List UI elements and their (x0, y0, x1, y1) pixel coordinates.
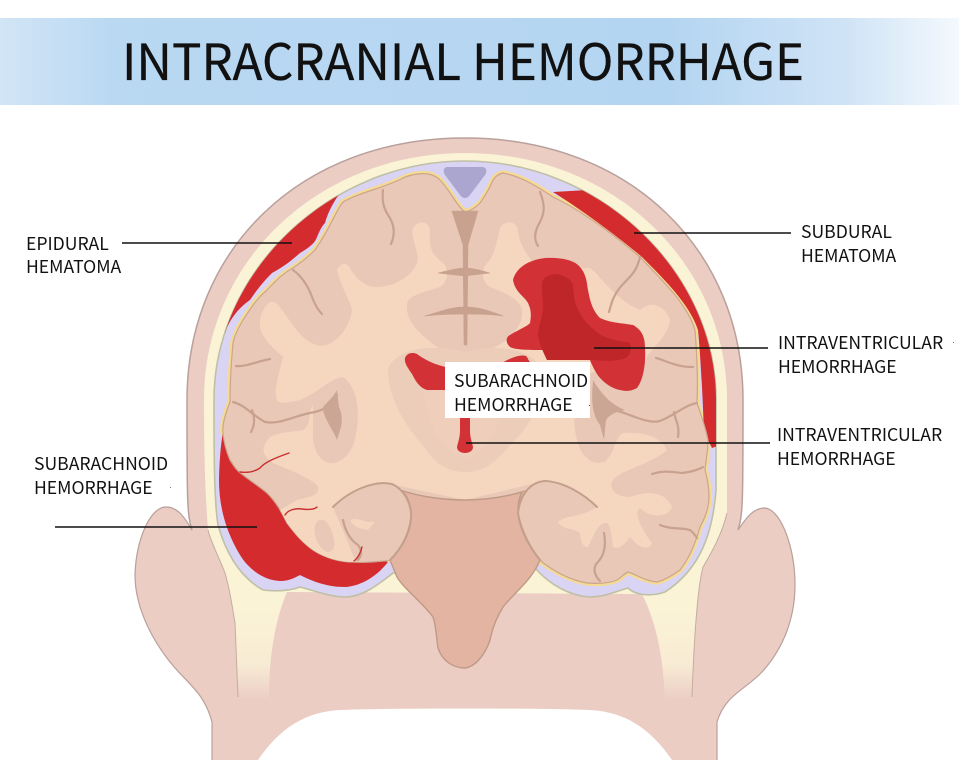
subarachnoid hemorrhage left region (219, 434, 388, 587)
sylvian fissures (323, 390, 342, 440)
meningeal bleeding vessels (240, 453, 362, 561)
brain stem (390, 490, 540, 668)
label: epidural hematoma (26, 231, 121, 279)
dura: lavender layer (214, 161, 716, 597)
label: intraventricular hemorrhage upper: INTRAVENTRICULAR (778, 330, 943, 355)
label: intraventricular hemorrhage lower: INTRAVENTRICULAR (777, 422, 942, 447)
label: epidural hematoma: HEMATOMA (26, 254, 121, 279)
scalp (187, 138, 743, 600)
ears and neck (135, 507, 795, 760)
label: intraventricular hemorrhage lower: HEMORRHAGE (777, 446, 896, 471)
intraparenchymal hemorrhage (507, 258, 645, 391)
white matter (260, 222, 672, 565)
brain (223, 173, 709, 583)
label: intraventricular hemorrhage upper: HEMORRHAGE (778, 354, 897, 379)
epidural hematoma (224, 195, 338, 333)
subdural hematoma (553, 190, 716, 448)
label: subdural hematoma: HEMATOMA (801, 243, 896, 268)
small cortical patch (315, 520, 334, 552)
basal ganglia shading (388, 348, 542, 472)
label: subarachnoid hemorrhage left: SUBARACHNOID (34, 451, 168, 476)
label: epidural hematoma: EPIDURAL (26, 231, 109, 256)
lower pink tissue (269, 592, 665, 705)
hemorrhage layers clipped to the dura (215, 187, 760, 587)
skull (204, 153, 727, 700)
label: subarachnoid hemorrhage left (34, 451, 168, 500)
ear outlines (135, 507, 795, 760)
label: intraventricular hemorrhage lower (777, 422, 942, 471)
label box: subarachnoid hemorrhage center: HEMORRHAGE (454, 392, 573, 417)
title banner (0, 18, 959, 105)
temporal lobe outlines (333, 481, 597, 560)
leader line: intraventricular lower (466, 442, 770, 444)
hemorrhage core (538, 274, 631, 361)
superior sagittal sinus (444, 167, 486, 198)
lateral ventricle left (405, 353, 450, 390)
leader line: intraventricular upper (594, 347, 768, 349)
label: subarachnoid hemorrhage left: HEMORRHAGE (34, 475, 153, 500)
label box: subarachnoid hemorrhage center: SUBARACHNOID (454, 368, 588, 393)
label: subdural hematoma: SUBDURAL (801, 219, 892, 244)
label: intraventricular hemorrhage upper (778, 330, 943, 379)
brain membrane yellow (223, 173, 709, 583)
label: subdural hematoma (801, 219, 896, 268)
head illustration (135, 138, 795, 760)
insula cortex right (574, 372, 617, 463)
title: INTRACRANIAL HEMORRHAGE (122, 23, 804, 95)
leader line: epidural (122, 242, 292, 244)
lateral ventricle right (500, 355, 530, 372)
cerebral fissure and sulci (233, 190, 703, 581)
third ventricle (457, 415, 473, 453)
label box: subarachnoid hemorrhage center (445, 362, 590, 418)
skull outer edge lines (208, 513, 727, 697)
left temporal lobe (342, 484, 389, 562)
leader line: subdural (634, 232, 791, 234)
leader line: subarachnoid left (55, 526, 257, 528)
insula cortex left (313, 377, 358, 463)
